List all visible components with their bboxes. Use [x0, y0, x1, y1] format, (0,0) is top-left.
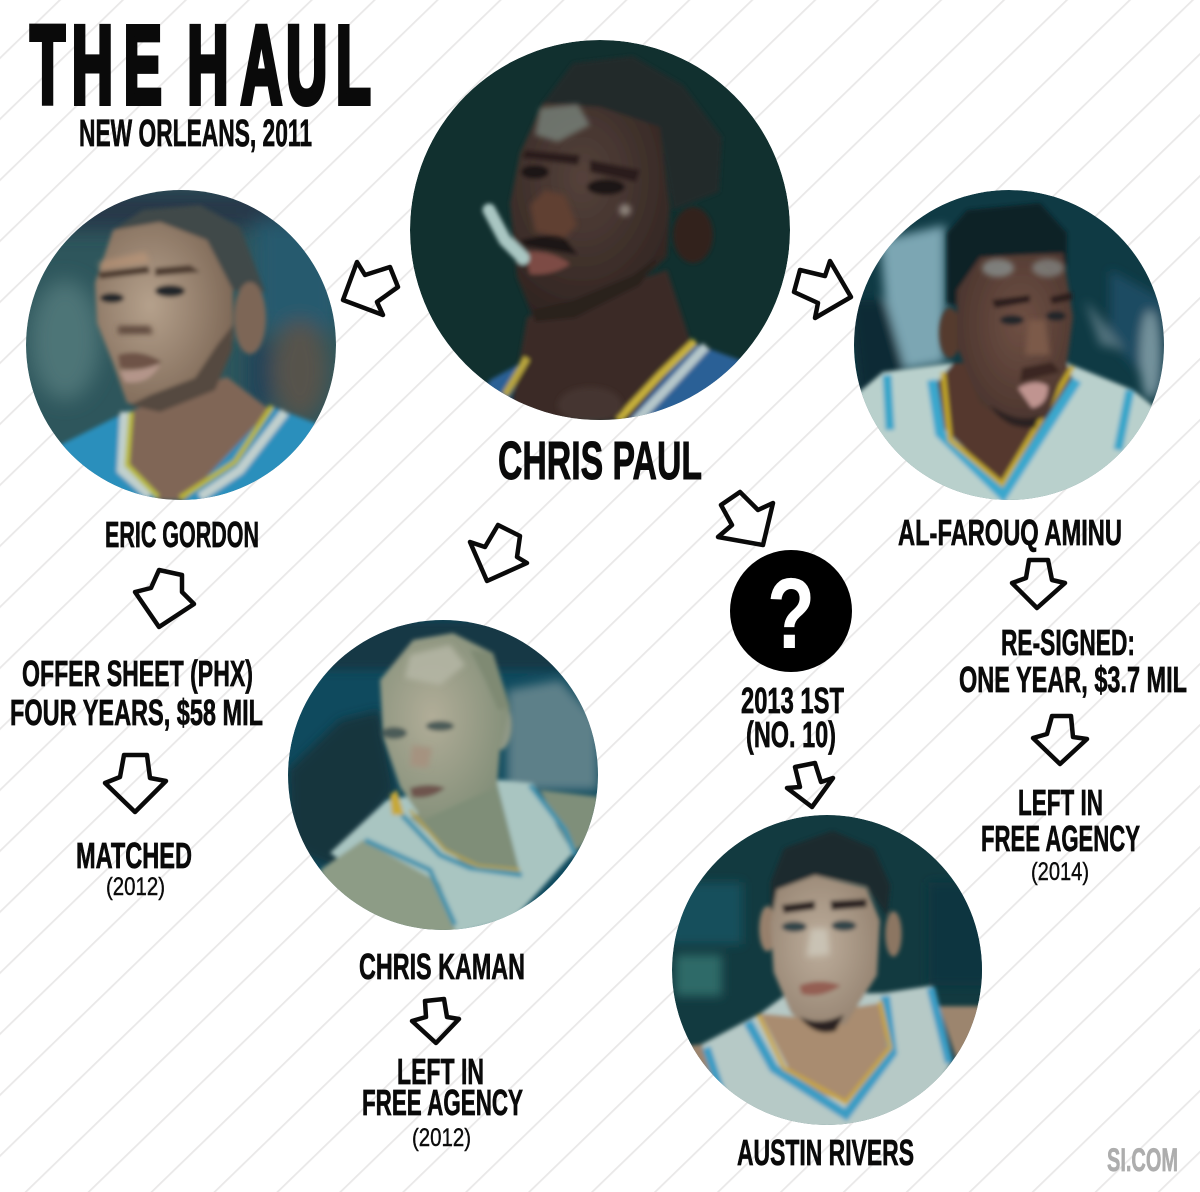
portrait: Austin Rivers	[672, 815, 982, 1125]
arrow: Chris Paul to Chris Kaman	[470, 525, 527, 581]
arrow: Chris Paul to Al-Farouq Aminu	[794, 261, 851, 318]
arrow: Aminu to re-signed	[1012, 560, 1065, 608]
text: offer sheet details	[10, 653, 263, 733]
label: Chris Paul: CHRIS PAUL	[498, 431, 702, 491]
portrait: Al-Farouq Aminu	[850, 190, 1170, 520]
icon: question mark circle	[730, 550, 852, 672]
text: Kaman left in free agency: LEFT IN	[397, 1051, 484, 1092]
text: offer sheet details: OFFER SHEET (PHX)	[22, 653, 253, 694]
subtitle: NEW ORLEANS, 2011	[79, 113, 312, 155]
label: Chris Kaman: CHRIS KAMAN	[359, 946, 525, 987]
label: draft pick: (NO. 10)	[746, 714, 836, 755]
arrow: Chris Paul to Eric Gordon	[343, 262, 398, 315]
icon: question mark circle: ?	[767, 558, 815, 670]
portrait: Chris Kaman	[288, 620, 600, 935]
text: offer sheet details: FOUR YEARS, $58 MIL	[10, 692, 263, 733]
title: THE HAUL	[30, 4, 371, 127]
text: Kaman left in free agency: FREE AGENCY	[362, 1082, 523, 1123]
text: matched outcome	[76, 835, 192, 901]
arrow: Kaman to left in free agency	[412, 999, 459, 1043]
portrait: Chris Paul	[410, 40, 790, 430]
label: draft pick	[741, 680, 844, 755]
text: Kaman left in free agency	[362, 1051, 523, 1152]
text: Kaman left in free agency: (2012)	[412, 1124, 471, 1152]
text: matched outcome: MATCHED	[76, 835, 192, 876]
text: Aminu left in free agency: (2014)	[1031, 858, 1089, 886]
arrow: Chris Paul to draft pick	[718, 492, 773, 545]
arrow: offer sheet to matched	[105, 755, 166, 812]
arrow: Eric Gordon to offer sheet	[135, 570, 194, 627]
label: Eric Gordon: ERIC GORDON	[105, 514, 259, 555]
text: Aminu left in free agency: LEFT IN	[1018, 782, 1103, 823]
text: Aminu left in free agency	[981, 782, 1140, 886]
label: Austin Rivers: AUSTIN RIVERS	[737, 1132, 914, 1173]
text: re-signed details	[959, 622, 1187, 700]
text: matched outcome: (2012)	[106, 873, 165, 901]
label: draft pick: 2013 1ST	[741, 680, 844, 721]
arrow: draft pick to Austin Rivers	[787, 763, 833, 807]
arrow: re-signed to left in free agency	[1033, 716, 1087, 764]
portrait: Eric Gordon	[20, 190, 340, 505]
